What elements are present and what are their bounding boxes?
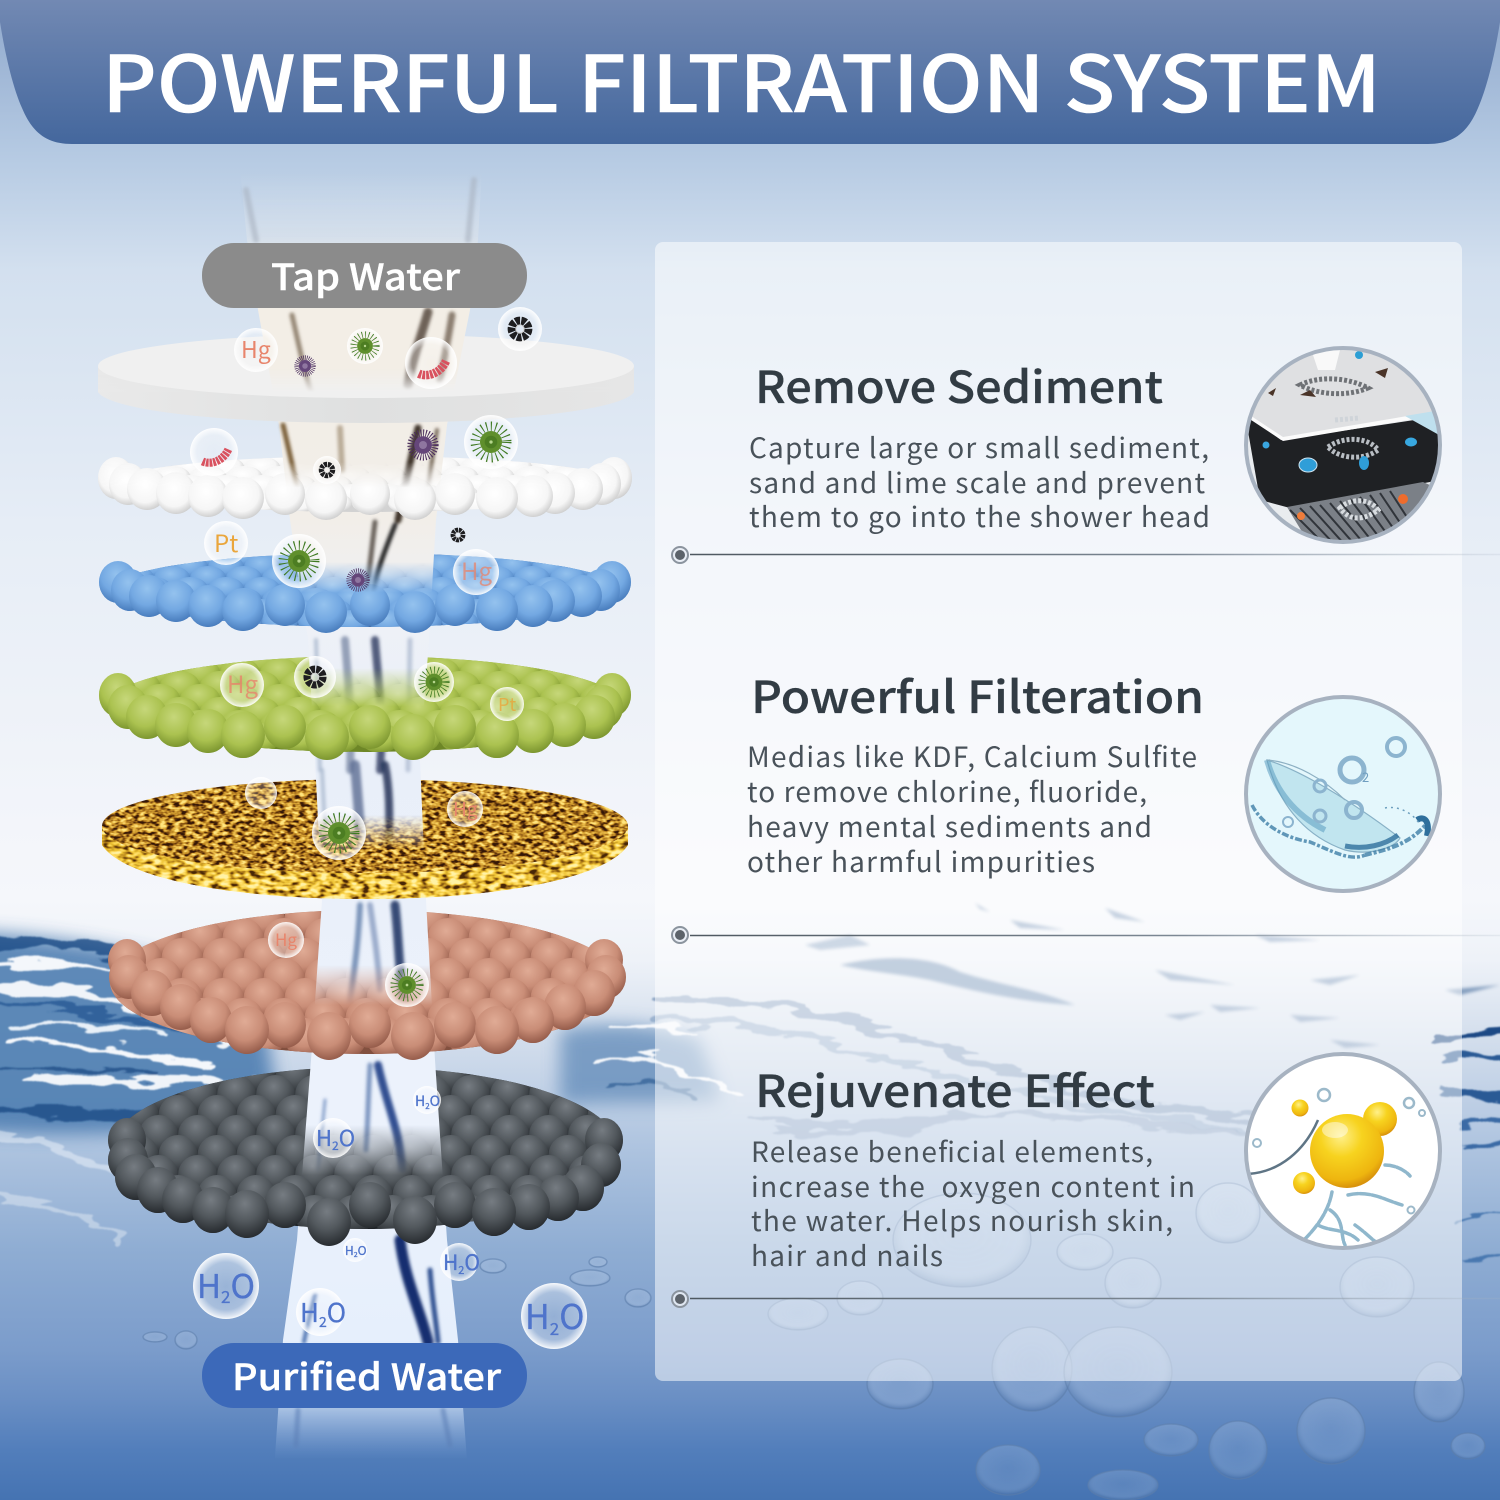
filter layers front halves <box>99 370 631 1246</box>
icon: sediment layers <box>1245 345 1441 545</box>
bubble: green virus <box>414 662 454 702</box>
text: filtration description: other harmful impurities <box>747 841 1095 881</box>
layer 2: white ceramic beads <box>98 457 632 520</box>
filter layers back copy <box>98 336 634 1238</box>
bubble: H2O <box>413 1086 441 1114</box>
bubble: H2O: O <box>339 1121 355 1153</box>
bubble: black particle <box>294 656 336 698</box>
bubble: H2O: H <box>345 1242 354 1259</box>
text: filtration description: Medias like KDF, Calcium Sulfite <box>747 736 1197 776</box>
water stream through filter <box>240 170 482 1500</box>
bubble: H2O: O <box>327 1293 346 1330</box>
bubble: green virus <box>272 534 326 588</box>
text: rejuvenate description: increase the oxygen content in <box>751 1166 1195 1206</box>
text: rejuvenate description: the water. Helps nourish skin, <box>751 1200 1173 1240</box>
text: remove sediment description: Capture large or small sediment, <box>749 427 1209 467</box>
bubble: Hg <box>453 549 499 595</box>
header banner <box>0 0 1500 144</box>
layer 6: copper beads <box>108 911 626 1060</box>
bubble: H2O: 2 <box>221 1283 230 1308</box>
germ: purple virus <box>349 571 367 589</box>
germ: purple virus <box>297 358 313 374</box>
text: remove sediment description: them to go into the shower head <box>749 496 1210 536</box>
bubble: green virus <box>464 415 518 469</box>
bubble: H2O <box>313 1118 355 1158</box>
heading: powerful filteration: Powerful Filteration <box>751 662 1204 726</box>
bubble: green virus <box>347 328 383 364</box>
icon: yellow molecule <box>1245 1053 1441 1249</box>
bubble: Pt: Pt <box>214 524 238 559</box>
pill: purified water <box>202 1343 527 1408</box>
connector line 1 <box>672 547 1500 563</box>
bubble: H2O: 2 <box>425 1101 430 1112</box>
bubble: Pt <box>490 687 524 721</box>
bubble: H2O <box>440 1243 480 1281</box>
bubble: H2O: O <box>559 1290 584 1339</box>
bubble: H2O: O <box>358 1242 367 1259</box>
bubble: green virus <box>312 806 366 860</box>
layer 3: blue beads <box>99 554 631 633</box>
bubble: H2O: H <box>415 1091 425 1111</box>
bubble: Hg <box>220 663 264 707</box>
bubble: Hg: Hg <box>453 795 478 822</box>
bubble: Hg: Hg <box>227 665 258 700</box>
icon: contact lens and oxygen: 2 <box>1362 767 1369 786</box>
icon: contact lens and oxygen <box>1245 696 1441 892</box>
bubble: empty on gold disk <box>245 777 277 809</box>
text: rejuvenate description: hair and nails <box>751 1235 943 1275</box>
heading: remove sediment: Remove Sediment <box>755 352 1163 416</box>
text: filtration description: heavy mental sediments and <box>747 806 1152 846</box>
pill: purified water: Purified Water <box>232 1349 501 1401</box>
bubble: black particle <box>498 307 542 351</box>
layer 7: dark activated carbon beads <box>108 1068 623 1246</box>
text: filtration description: to remove chlorine, fluoride, <box>747 771 1147 811</box>
bubble: Pt: Pt <box>498 691 516 717</box>
pill: tap water <box>202 243 527 308</box>
bubble: H2O: H <box>300 1293 319 1330</box>
bubble: Hg: Hg <box>461 552 492 587</box>
bubble: Hg <box>268 922 304 958</box>
text: rejuvenate description: Release beneficial elements, <box>751 1131 1153 1171</box>
text: rejuvenate description <box>751 1131 1195 1275</box>
bubble: black particle <box>453 530 463 540</box>
text: filtration description <box>747 736 1197 881</box>
bubble: H2O: O <box>230 1260 255 1308</box>
bubble: H2O: 2 <box>458 1262 464 1278</box>
connector line 3 <box>672 1291 1500 1307</box>
bubble: H2O <box>296 1288 346 1336</box>
bubble: Pt <box>204 521 248 565</box>
layer 4: green beads <box>99 657 631 760</box>
bubble: red bacteria <box>190 428 238 476</box>
text: remove sediment description <box>749 427 1210 536</box>
bubble: green virus <box>385 963 429 1007</box>
icon ring: molecule <box>1246 1054 1440 1248</box>
bubble: Hg: Hg <box>241 331 271 365</box>
bubble: H2O: 2 <box>319 1312 327 1332</box>
panel: benefits background <box>655 242 1462 1381</box>
bubble: H2O: O <box>464 1247 480 1277</box>
heading: rejuvenate effect: Rejuvenate Effect <box>755 1056 1155 1120</box>
bubble: H2O: H <box>525 1290 550 1339</box>
bubble: H2O: H <box>197 1260 221 1308</box>
icon ring: sediment <box>1246 348 1440 542</box>
water waves <box>0 903 1500 1500</box>
bubble: H2O <box>193 1253 259 1319</box>
bubble: Hg <box>447 791 483 827</box>
bubble: red bacteria <box>405 337 457 389</box>
title: POWERFUL FILTRATION SYSTEM <box>102 23 1381 135</box>
text: remove sediment description: sand and lime scale and prevent <box>749 462 1205 502</box>
connector line 2 <box>672 927 1500 943</box>
germ: purple virus <box>411 433 435 457</box>
bubble: Hg <box>234 328 278 372</box>
bubble: H2O: H <box>443 1247 458 1277</box>
layer 5: gold KDF media disk <box>102 779 628 899</box>
bubble: H2O: H <box>316 1121 332 1153</box>
bubble: H2O: O <box>430 1091 440 1111</box>
layer 1: white sediment disk <box>98 334 634 423</box>
bubble: H2O: 2 <box>332 1137 339 1154</box>
bubble: Hg: Hg <box>275 926 297 951</box>
bubble: H2O: 2 <box>550 1315 559 1340</box>
pill: tap water: Tap Water <box>271 249 460 301</box>
bubble: H2O <box>343 1238 367 1262</box>
bubble: black particle <box>313 456 341 484</box>
icon ring: oxygen <box>1246 697 1440 891</box>
bubble: H2O <box>521 1283 587 1349</box>
bubble: H2O: 2 <box>354 1250 358 1260</box>
